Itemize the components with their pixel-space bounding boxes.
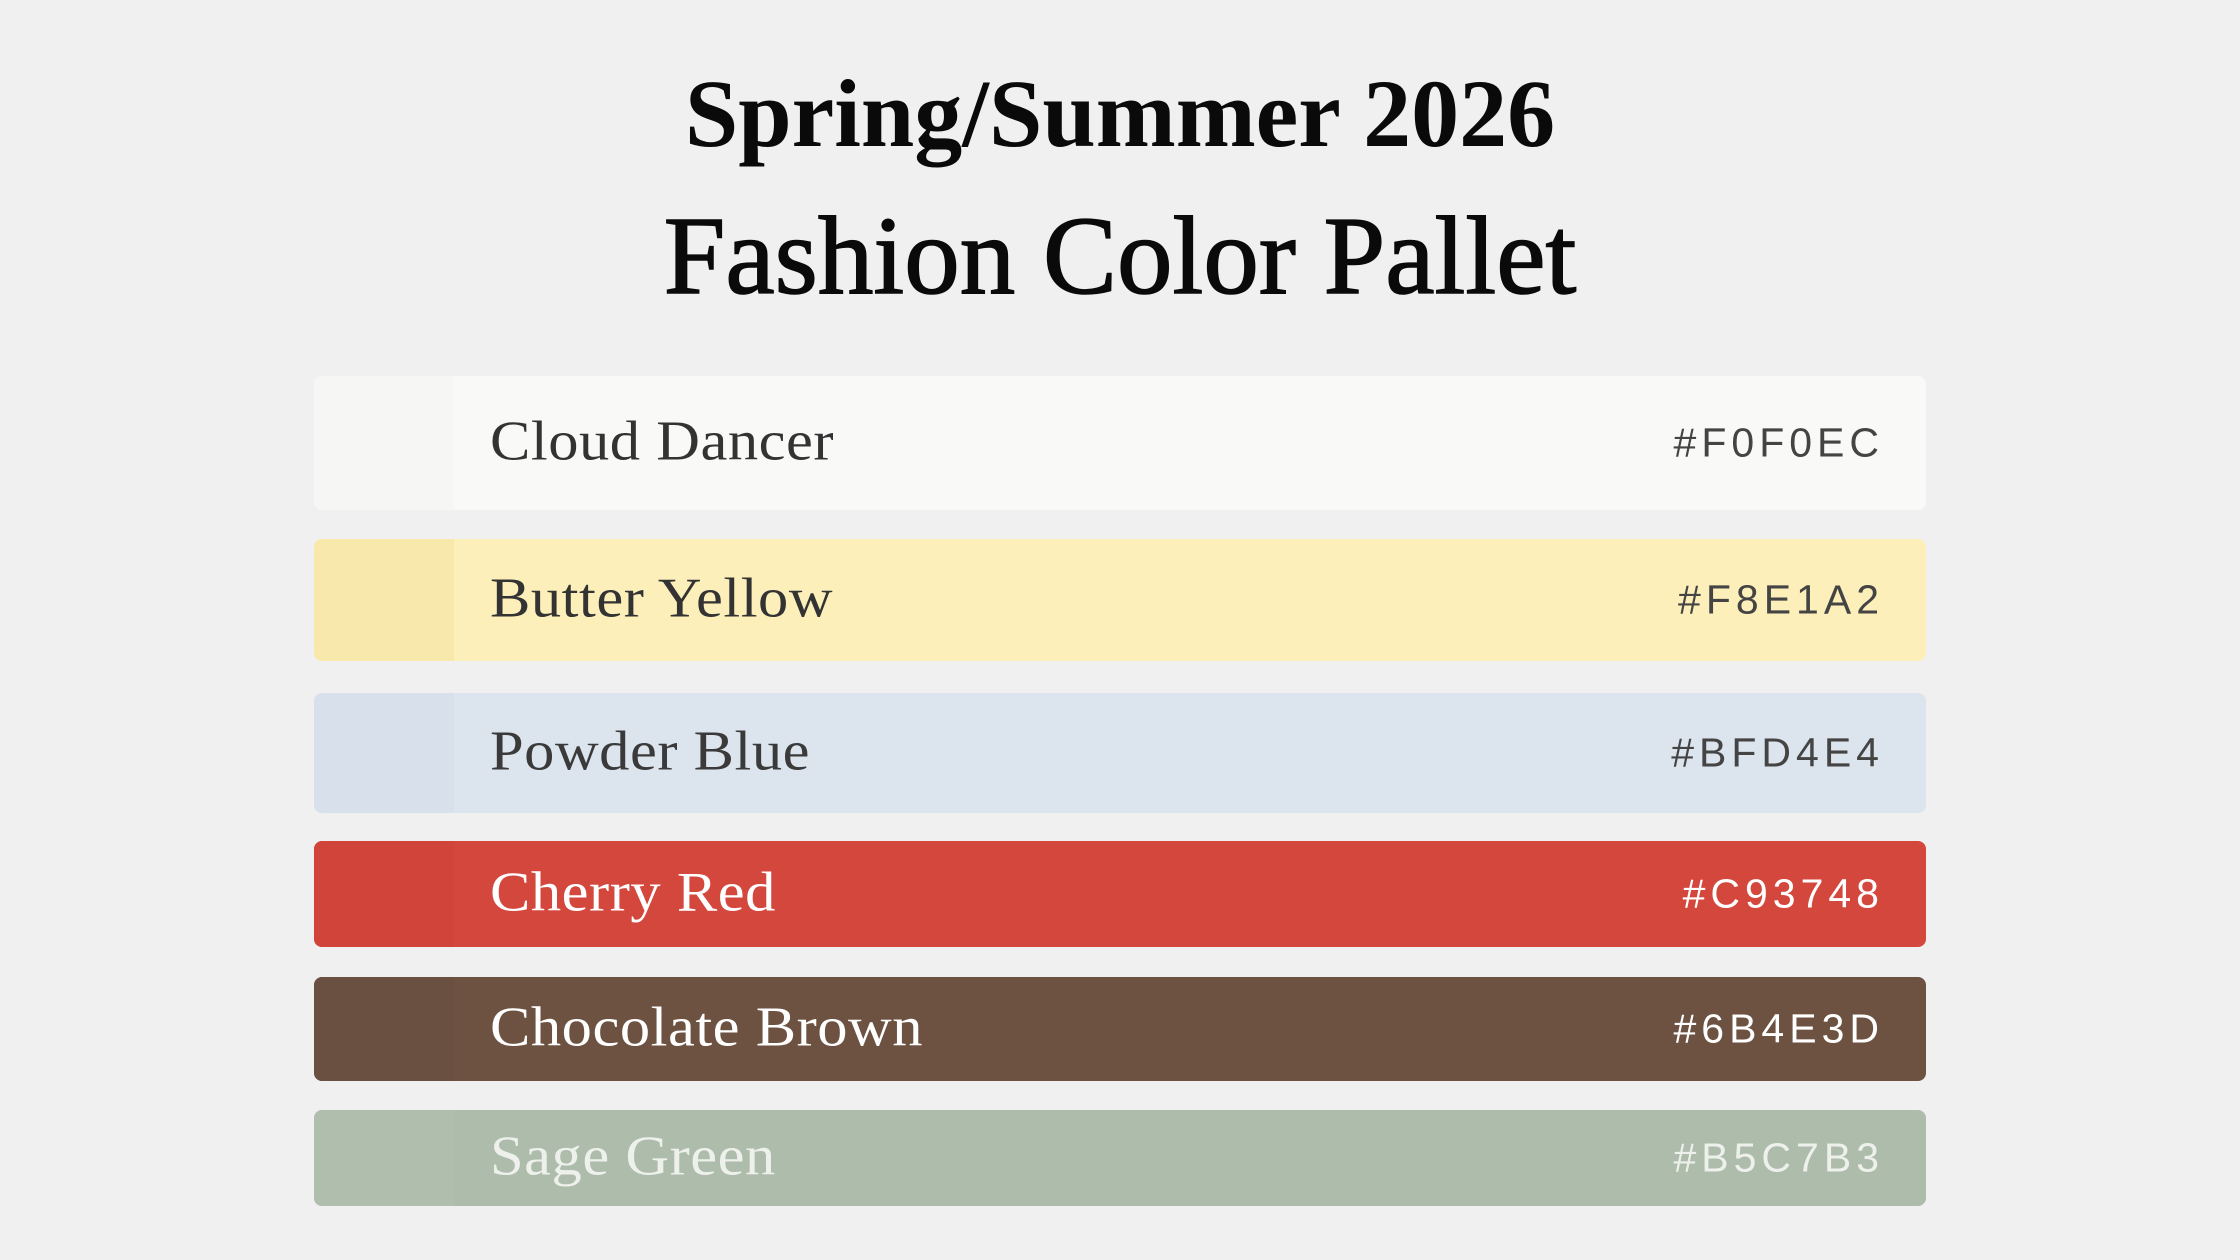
- title line 2: Fashion Color Pallet: [664, 195, 1576, 318]
- swatch: Chocolate Brown: [314, 977, 1926, 1081]
- swatch: Powder Blue: [314, 693, 1926, 813]
- swatch: Powder Blue: Powder Blue: [490, 721, 810, 783]
- swatch: Butter Yellow: [314, 539, 1926, 661]
- swatch: Chocolate Brown: Chocolate Brown: [490, 997, 923, 1059]
- swatch: Sage Green: #B5C7B3: [1673, 1134, 1884, 1180]
- swatch: Powder Blue: #BFD4E4: [1671, 730, 1884, 776]
- title line 1: Spring/Summer 2026: [685, 60, 1555, 167]
- swatch: Cloud Dancer: #F0F0EC: [1674, 420, 1884, 466]
- swatch: Cloud Dancer: Cloud Dancer: [490, 411, 834, 473]
- swatch: Cherry Red: #C93748: [1683, 870, 1884, 916]
- swatch: Cherry Red: [314, 841, 1926, 947]
- swatch: Cherry Red: Cherry Red: [490, 862, 776, 924]
- swatch: Cloud Dancer: [314, 376, 1926, 510]
- swatch: Butter Yellow: Butter Yellow: [490, 568, 833, 630]
- swatch: Butter Yellow: #F8E1A2: [1678, 576, 1884, 622]
- swatch: Sage Green: Sage Green: [490, 1126, 776, 1188]
- swatch: Sage Green: [314, 1110, 1926, 1206]
- swatch: Chocolate Brown: #6B4E3D: [1673, 1006, 1884, 1052]
